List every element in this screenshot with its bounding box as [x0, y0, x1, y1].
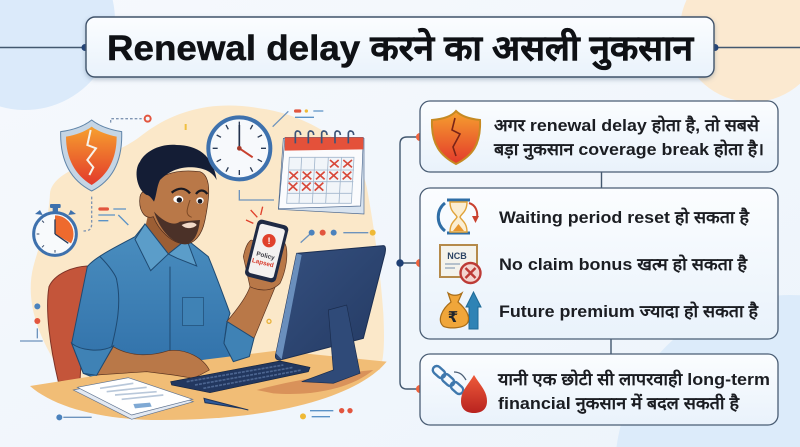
chair [48, 266, 87, 382]
text block: अगर renewal delay होता है, तो सबसे [494, 115, 761, 135]
raised arm [227, 283, 277, 338]
icon: stopwatch [34, 204, 76, 255]
title [86, 17, 714, 77]
icon: NCB certificate: NCB [447, 251, 467, 261]
icon: broken shield [61, 120, 122, 191]
panel: financial loss [420, 354, 778, 425]
icon: phone policy lapsed [243, 207, 289, 290]
pen [204, 398, 248, 410]
text block: बड़ा नुकसान coverage break होता है। [493, 139, 764, 160]
text block [493, 115, 764, 160]
text: waiting period: Waiting period reset हो सकता है [499, 207, 750, 227]
icon: calendar with crosses [278, 131, 364, 214]
icon: hourglass [438, 200, 479, 233]
icon: money bag with arrow [440, 292, 481, 329]
connector dots [82, 44, 718, 393]
hair [137, 145, 217, 202]
icon: computer monitor [275, 246, 385, 383]
text block [497, 369, 770, 414]
peach background blob [31, 105, 384, 380]
panel: coverage break [420, 101, 778, 172]
icon: phone policy lapsed: ! [267, 236, 271, 246]
head [140, 171, 209, 244]
icon: money bag with arrow: ₹ [448, 309, 458, 326]
panel: consequences [420, 188, 778, 339]
shirt [72, 224, 233, 380]
connector lines [0, 48, 800, 389]
title: Renewal delay करने का असली नुकसान [107, 28, 695, 70]
text: future premium: Future premium ज्यादा हो सकता है [499, 301, 759, 321]
decorative icons and connector marks [20, 111, 368, 417]
icon: phone policy lapsed: Lapsed [251, 257, 275, 269]
documents [73, 378, 193, 419]
keyboard [171, 361, 310, 393]
neck [145, 213, 188, 255]
text block: financial नुकसान में बदल सकती है [498, 393, 740, 414]
icon: broken shield small [432, 111, 480, 164]
icon: NCB certificate [440, 245, 480, 283]
text: no claim bonus: No claim bonus खत्म हो सकता है [499, 254, 748, 274]
forearm and hand on keyboard [97, 347, 209, 378]
icon: wall clock [208, 117, 270, 179]
icon: broken chain and drop [431, 364, 487, 413]
illustration: worried man at desk [20, 105, 387, 420]
icon: phone policy lapsed: Policy [256, 250, 276, 262]
text block: यानी एक छोटी सी लापरवाही long-term [497, 369, 770, 389]
eyes [173, 196, 183, 203]
desk [30, 351, 387, 420]
